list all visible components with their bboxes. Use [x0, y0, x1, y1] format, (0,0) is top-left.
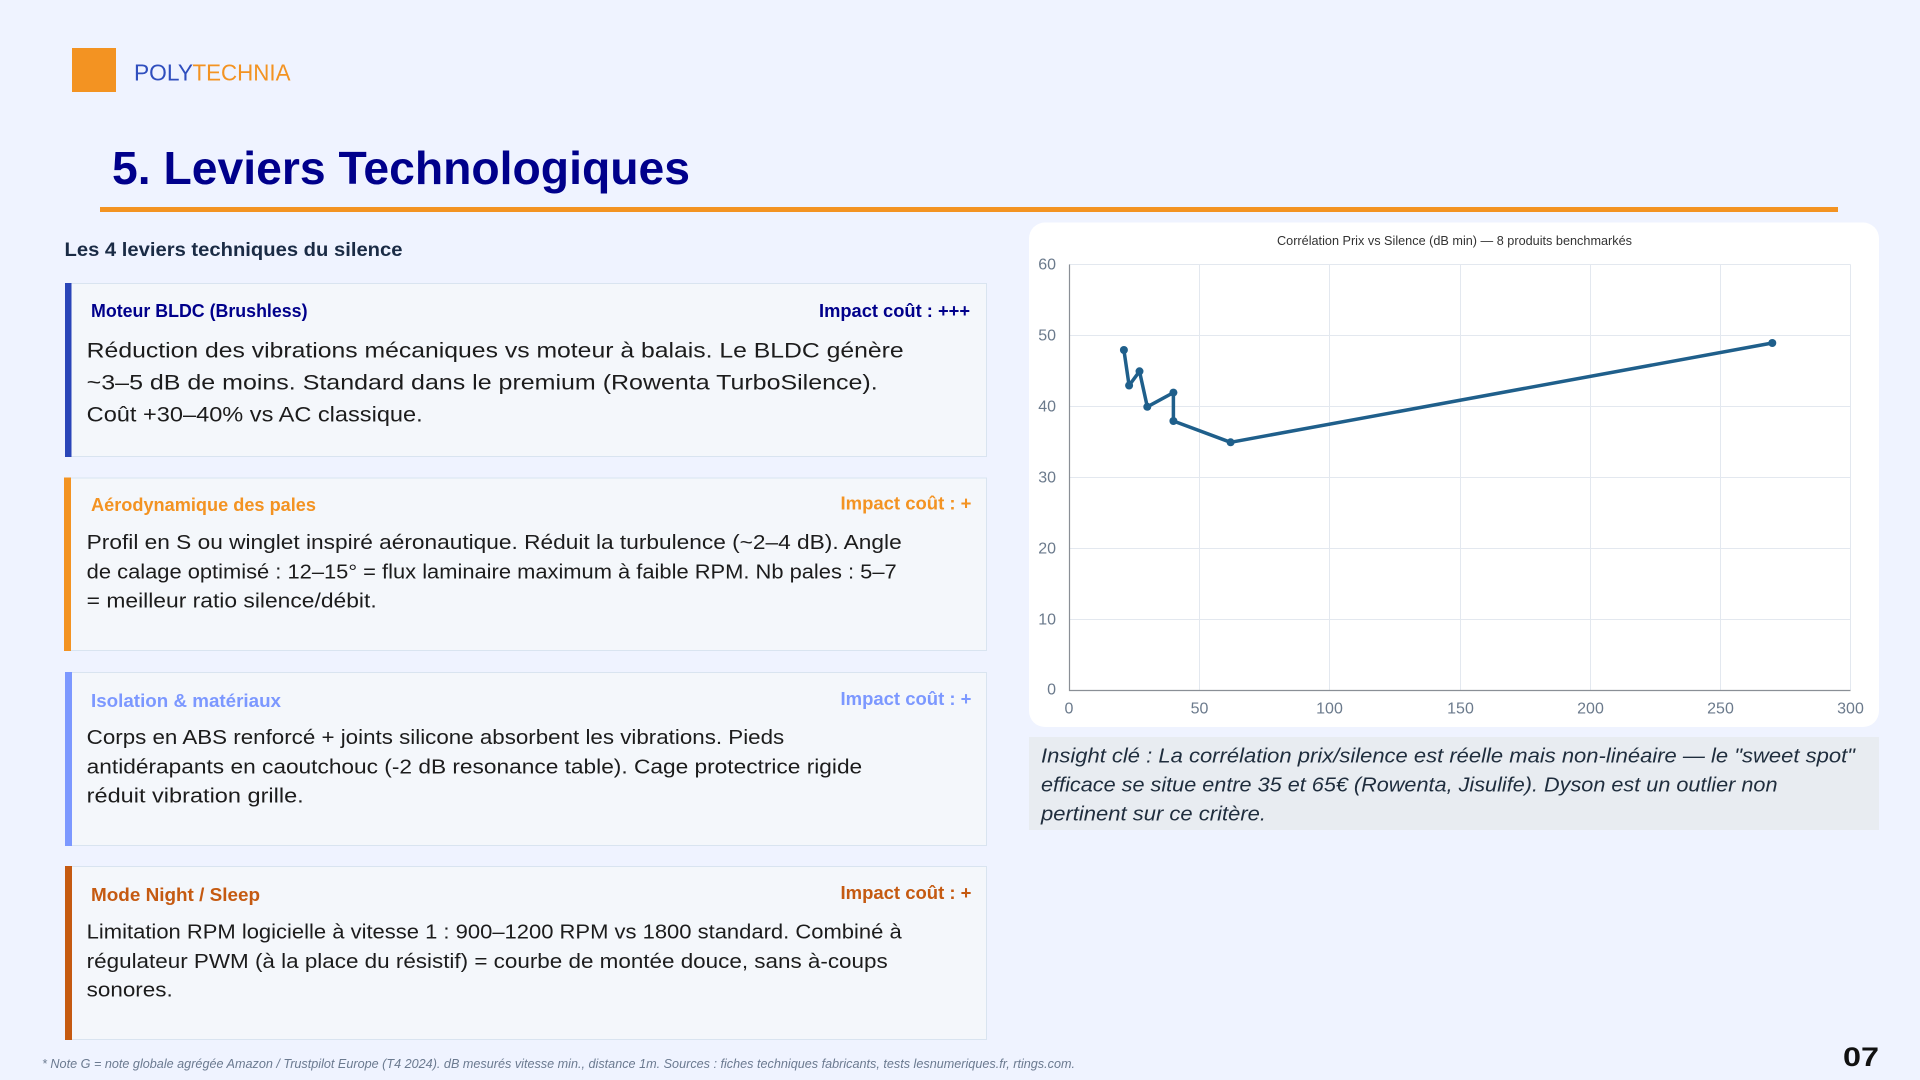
panel: Mode Night / Sleep: régulateur PWM (à la place du résistif) = courbe de montée douce, sans à-coups — [87, 951, 888, 973]
panel: Moteur BLDC: Réduction des vibrations mécaniques vs moteur à balais. Le BLDC génère — [87, 338, 904, 362]
y axis labels: 20 — [1038, 540, 1056, 558]
callout: insight: efficace se situe entre 35 et 65€ (Rowenta, Jisulife). Dyson est un outlier non — [1041, 774, 1778, 796]
y axis labels: 60 — [1038, 256, 1056, 274]
x axis labels: 50 — [1191, 700, 1208, 718]
x axis labels: 200 — [1577, 700, 1604, 718]
x axis labels — [1065, 700, 1864, 718]
panel: Aérodynamique des pales — [64, 478, 986, 651]
panel: Moteur BLDC: Coût +30–40% vs AC classique. — [87, 402, 423, 426]
x axis labels: 300 — [1837, 700, 1864, 718]
y axis labels: 50 — [1038, 328, 1056, 344]
y axis labels — [1038, 256, 1056, 698]
data line — [1120, 339, 1776, 446]
x axis labels: 150 — [1447, 700, 1474, 718]
x axis labels: 0 — [1065, 700, 1074, 718]
panel: Aérodynamique des pales: Impact coût : + — [840, 492, 972, 514]
subheading: Les 4 leviers techniques du silence — [64, 239, 403, 261]
panel: Aérodynamique des pales: Profil en S ou winglet inspiré aéronautique. Réduit la turbulence (~2–4 dB). Angle — [87, 532, 902, 554]
y axis labels: 0 — [1047, 682, 1056, 698]
panel: Mode Night / Sleep: sonores. — [87, 980, 173, 1002]
callout: insight: Insight clé : La corrélation prix/silence est réelle mais non-linéaire — le "sweet spot" — [1041, 744, 1857, 768]
y axis labels: 10 — [1038, 612, 1056, 628]
panel: Isolation & matériaux — [65, 672, 986, 846]
y axis labels: 40 — [1038, 398, 1056, 416]
panel: Mode Night / Sleep — [65, 866, 986, 1040]
panel: Aérodynamique des pales: = meilleur ratio silence/débit. — [87, 590, 377, 612]
panel: Aérodynamique des pales: de calage optimisé : 12–15° = flux laminaire maximum à faible RPM. Nb pales : 5–7 — [87, 562, 897, 584]
footnote: * Note G = note globale agrégée Amazon / Trustpilot Europe (T4 2024). dB mesurés vitesse min., distance 1m. Sources : fiches techniques fabricants, tests lesnumeriques.fr, rtings.com. — [42, 1056, 1075, 1071]
x axis labels: 250 — [1707, 700, 1734, 718]
panel: Aérodynamique des pales: Aérodynamique des pales — [91, 494, 316, 515]
page number: 07 — [1843, 1042, 1879, 1072]
panel: Moteur BLDC: Moteur BLDC (Brushless) — [91, 300, 308, 321]
panel: chart — [1029, 222, 1879, 727]
panel: Isolation & matériaux: Isolation & matériaux — [91, 690, 282, 711]
callout: insight: pertinent sur ce critère. — [1040, 802, 1266, 826]
x axis labels: 100 — [1316, 700, 1343, 718]
panel: Moteur BLDC: ~3–5 dB de moins. Standard dans le premium (Rowenta TurboSilence). — [87, 370, 878, 394]
callout: insight — [1029, 737, 1879, 830]
logo — [72, 48, 291, 92]
panel: Isolation & matériaux: réduit vibration grille. — [87, 786, 304, 808]
title: 5. Leviers Technologiques — [112, 142, 690, 194]
logo: TECHNIA — [192, 60, 291, 86]
panel: Isolation & matériaux: Corps en ABS renforcé + joints silicone absorbent les vibrations. Pieds — [87, 727, 784, 749]
panel: Mode Night / Sleep: Limitation RPM logicielle à vitesse 1 : 900–1200 RPM vs 1800 standard. Combiné à — [87, 922, 903, 944]
panel: Moteur BLDC: Impact coût : +++ — [819, 300, 970, 321]
panel: Moteur BLDC — [65, 283, 986, 457]
chart title: Corrélation Prix vs Silence (dB min) — 8 produits benchmarkés — [1277, 234, 1632, 248]
panel: Mode Night / Sleep: Mode Night / Sleep — [91, 884, 260, 905]
logo: POLY — [134, 60, 193, 86]
panel: Isolation & matériaux: antidérapants en caoutchouc (-2 dB resonance table). Cage protectrice rigide — [87, 756, 862, 778]
panel: Isolation & matériaux: Impact coût : + — [840, 688, 972, 709]
y axis labels: 30 — [1038, 470, 1056, 486]
panel: Mode Night / Sleep: Impact coût : + — [840, 882, 972, 903]
